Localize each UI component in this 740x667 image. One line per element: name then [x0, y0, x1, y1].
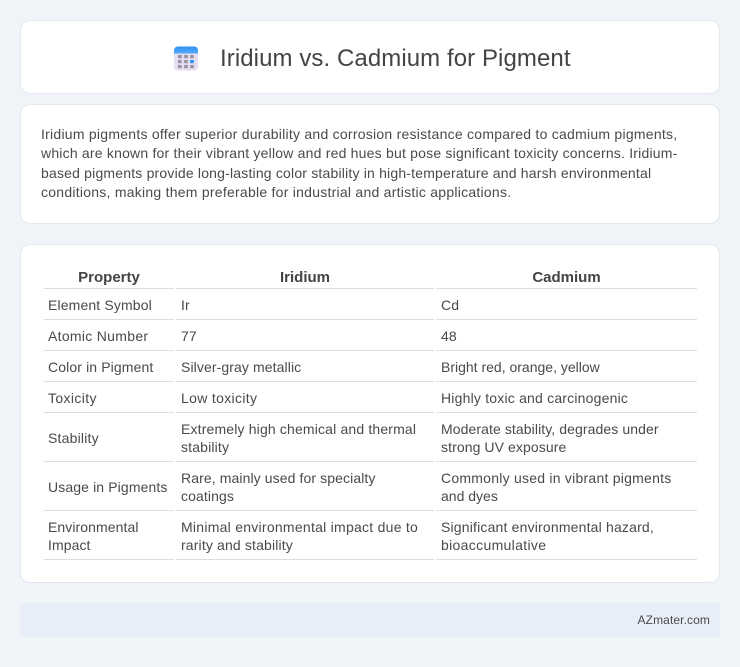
title card: [20, 20, 720, 94]
row: stability: Extremely high chemical and thermal: [181, 421, 416, 437]
row: environmental impact: bioaccumulative: [441, 537, 546, 553]
row: stability: stability: [181, 439, 229, 455]
row: toxicity: Low toxicity: [181, 390, 257, 406]
row: toxicity: Highly toxic and carcinogenic: [441, 390, 628, 406]
comparison table panel: [20, 244, 720, 583]
intro text: Iridium pigments offer superior durability and corrosion resistance compared to cadmium pigments,: [41, 126, 677, 142]
row: environmental impact: Impact: [48, 537, 90, 553]
row: atomic number: [48, 328, 457, 344]
row: element symbol: Cd: [441, 297, 459, 313]
intro text: conditions, making them preferable for industrial and artistic applications.: [41, 184, 511, 200]
table header: Iridium: [280, 269, 330, 286]
intro text: based pigments provide long-lasting color stability in high-temperature and harsh environmental: [41, 165, 651, 181]
row: environmental impact: [48, 519, 654, 553]
title: Iridium vs. Cadmium for Pigment: [220, 45, 571, 72]
row: stability: Moderate stability, degrades under: [441, 421, 659, 437]
table header: [78, 269, 601, 286]
row: stability: [48, 421, 659, 455]
row: color in pigment: Color in Pigment: [48, 359, 153, 375]
table header: Property: [78, 269, 140, 286]
row: color in pigment: Silver-gray metallic: [181, 359, 301, 375]
row: stability: Stability: [48, 430, 99, 446]
icon: calendar: [174, 46, 198, 70]
row: usage in pigments: coatings: [181, 488, 234, 504]
row: color in pigment: Bright red, orange, yellow: [441, 359, 600, 375]
row: usage in pigments: and dyes: [441, 488, 498, 504]
row: toxicity: Toxicity: [48, 390, 97, 406]
row: element symbol: Ir: [181, 297, 190, 313]
intro text: which are known for their vibrant yellow and red hues but pose significant toxicity concerns. Iridium-: [41, 145, 678, 161]
table: [44, 269, 697, 560]
row: usage in pigments: Usage in Pigments: [48, 479, 168, 495]
row: environmental impact: Significant environmental hazard,: [441, 519, 654, 535]
row: atomic number: Atomic Number: [48, 328, 148, 344]
intro panel: [20, 104, 720, 224]
row: element symbol: Element Symbol: [48, 297, 152, 313]
row: color in pigment: [48, 359, 600, 375]
footer bar: [20, 603, 720, 637]
row: toxicity: [48, 390, 628, 406]
row: element symbol: [48, 297, 459, 313]
table header: Cadmium: [532, 269, 601, 286]
intro text: [41, 126, 678, 200]
row: environmental impact: Minimal environmental impact due to: [181, 519, 418, 535]
row: usage in pigments: Commonly used in vibrant pigments: [441, 470, 671, 486]
row: stability: strong UV exposure: [441, 439, 566, 455]
row: environmental impact: rarity and stability: [181, 537, 293, 553]
row: usage in pigments: Rare, mainly used for specialty: [181, 470, 376, 486]
row: environmental impact: Environmental: [48, 519, 139, 535]
footer credit: AZmater.com: [638, 613, 710, 627]
row: atomic number: 48: [441, 328, 457, 344]
row: usage in pigments: [48, 470, 671, 504]
row: atomic number: 77: [181, 328, 197, 344]
